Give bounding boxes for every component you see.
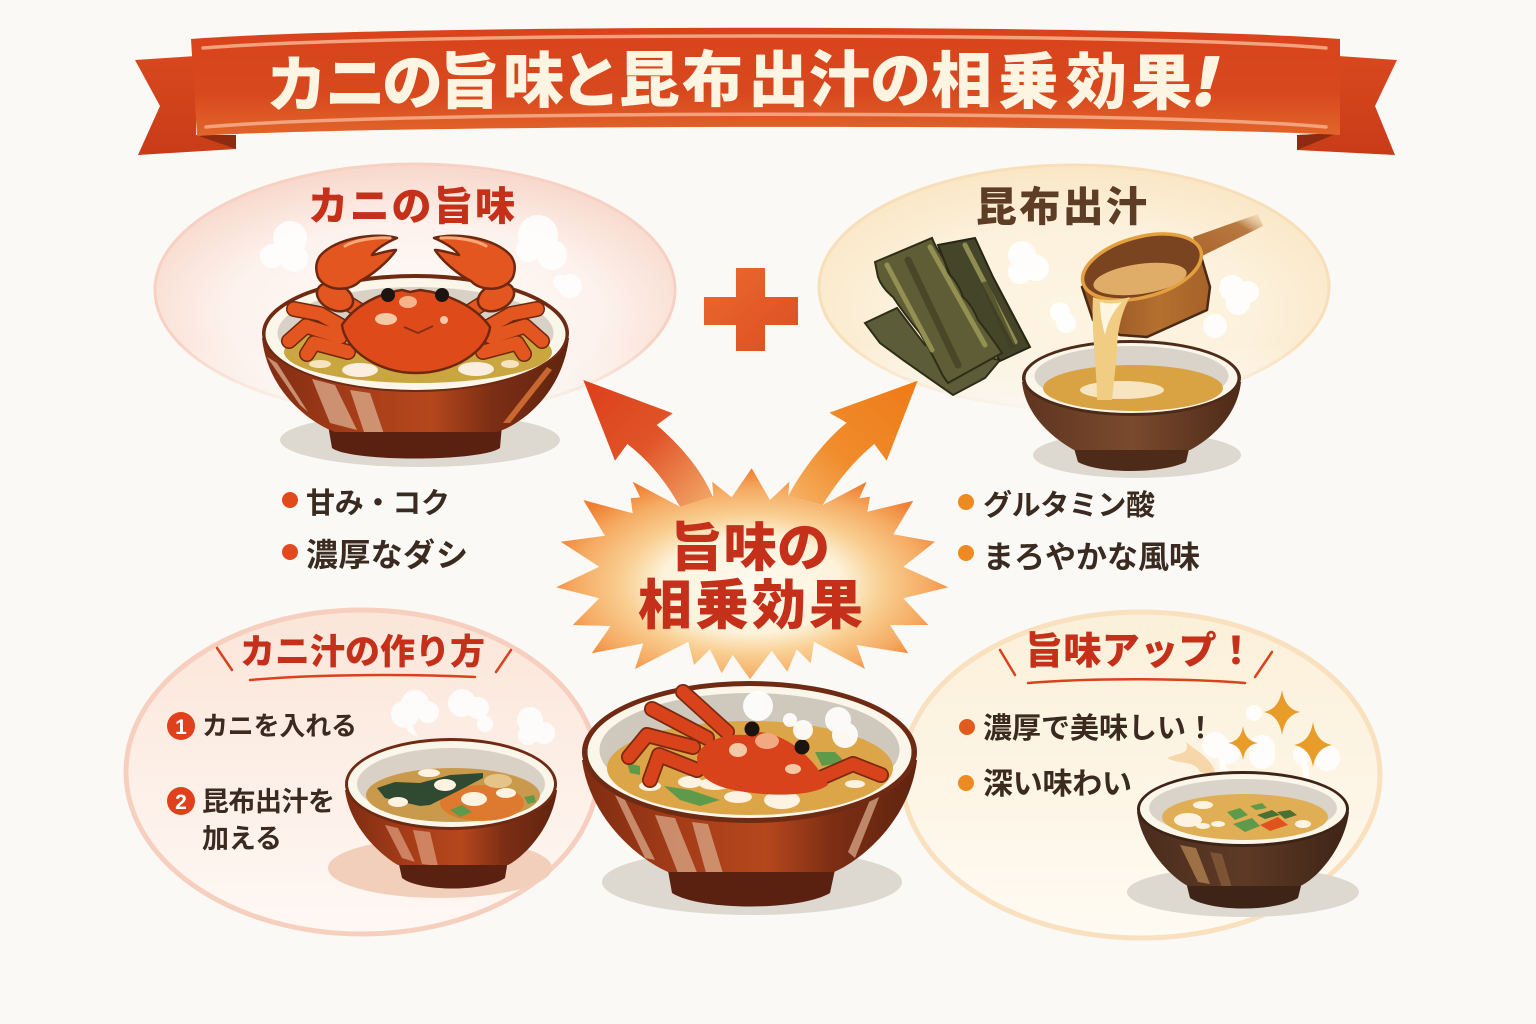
panel: recipe oval bbox=[126, 610, 598, 934]
body bbox=[1137, 812, 1349, 886]
illustration: centre crab soup bowl bbox=[582, 681, 917, 915]
step 2 bbox=[167, 787, 195, 815]
step 1 bbox=[167, 712, 195, 740]
item: 濃厚で美味しい！ bbox=[983, 712, 1215, 745]
burst text: 旨味の bbox=[670, 519, 830, 578]
front sheet bbox=[875, 238, 1002, 383]
illustration: kombu sheets bbox=[865, 238, 1030, 395]
item: 濃厚なダシ bbox=[306, 537, 468, 573]
bowl body bbox=[1022, 382, 1241, 450]
orange wisps bbox=[1167, 742, 1215, 775]
ladle broth bbox=[1091, 258, 1189, 300]
heading: kombu dashi: 昆布出汁 bbox=[976, 184, 1147, 230]
left legs and claw bbox=[289, 236, 397, 354]
foot bbox=[1185, 878, 1303, 908]
crab shell bbox=[697, 732, 828, 795]
bullet bbox=[959, 719, 975, 735]
crab eyes bbox=[744, 722, 760, 736]
heading decoration bbox=[217, 648, 511, 680]
recipe text: 1 bbox=[175, 716, 187, 739]
soup greens and foam bbox=[627, 752, 845, 806]
foot bbox=[667, 865, 836, 906]
illustration: finished soup bowl bbox=[1127, 771, 1359, 917]
burst shape bbox=[556, 468, 948, 679]
bullet bbox=[958, 494, 974, 510]
recipe text: 昆布出汁を bbox=[202, 787, 335, 817]
steam: umami bowl bbox=[1167, 705, 1340, 802]
banner fold shadows bbox=[196, 133, 1338, 150]
banner left tail bbox=[135, 56, 236, 155]
crab bbox=[289, 236, 542, 373]
bullet bbox=[958, 545, 974, 561]
rim bbox=[345, 738, 557, 830]
illustration: recipe bowl bbox=[328, 738, 557, 898]
kombu ribs bbox=[887, 245, 1015, 365]
stripes bbox=[385, 825, 438, 866]
ladle handle bbox=[1193, 214, 1263, 257]
stripes bbox=[1180, 845, 1232, 888]
left claw pincers bbox=[316, 236, 397, 289]
foam and greens bbox=[434, 779, 456, 791]
body bbox=[582, 760, 917, 872]
illustration: dashi bowl with ladle bbox=[1022, 214, 1263, 478]
shadow bbox=[602, 849, 902, 915]
steam clouds: crab bbox=[260, 215, 582, 298]
panel: kombu dashi oval bbox=[819, 165, 1329, 409]
icons: sparkles bbox=[1228, 690, 1332, 767]
item: 甘み・コク bbox=[306, 487, 450, 520]
heading decoration bbox=[1000, 650, 1272, 683]
item: グルタミン酸 bbox=[983, 489, 1155, 522]
recipe text bbox=[167, 633, 511, 854]
title text: カニの旨味と昆布出汁の相乗効果 bbox=[266, 46, 1192, 119]
body bbox=[345, 790, 557, 865]
illustration: crab in bowl bbox=[262, 236, 569, 467]
shell highlights bbox=[375, 313, 397, 325]
list: crab umami bbox=[282, 487, 468, 573]
plus sign bbox=[704, 268, 798, 351]
item: まろやかな風味 bbox=[983, 540, 1200, 575]
steam: recipe bowl bbox=[391, 689, 555, 762]
starburst: synergy bbox=[556, 468, 948, 679]
garnish bbox=[1227, 803, 1267, 832]
bowl shadow bbox=[280, 413, 560, 467]
recipe heading: カニ汁の作り方 bbox=[240, 633, 485, 672]
stripes bbox=[615, 795, 880, 880]
item: 深い味わい bbox=[983, 768, 1132, 801]
banner right tail bbox=[1297, 56, 1397, 155]
bullet bbox=[282, 544, 298, 560]
pouring stream bbox=[1093, 297, 1130, 400]
bullet bbox=[282, 492, 298, 508]
crab legs bbox=[629, 692, 881, 780]
crab shell bbox=[342, 290, 490, 373]
rim bbox=[1137, 771, 1349, 847]
steam clouds: kombu bbox=[1008, 241, 1259, 338]
bullet bbox=[958, 775, 974, 791]
umami up text bbox=[958, 631, 1272, 801]
heading: 旨味アップ！ bbox=[1025, 631, 1255, 673]
steam puffs bbox=[1202, 705, 1340, 771]
bowl rim bbox=[262, 274, 569, 392]
shadow bbox=[1127, 867, 1359, 917]
recipe text: カニを入れる bbox=[202, 711, 357, 741]
arrow: left, to crab bbox=[583, 380, 713, 507]
panel: umami up oval bbox=[902, 612, 1380, 938]
soup bbox=[284, 321, 552, 383]
bowl body bbox=[262, 338, 569, 432]
list: kombu dashi bbox=[958, 489, 1200, 575]
steam trails bbox=[1217, 763, 1306, 802]
bowl shadow bbox=[1033, 432, 1241, 478]
banner inner lines bbox=[203, 36, 1326, 127]
heading: crab umami: カニの旨味 bbox=[308, 185, 515, 229]
title banner bbox=[135, 28, 1397, 155]
steam in bowl bbox=[743, 691, 858, 748]
bowl stripes bbox=[267, 357, 552, 437]
under sheet bbox=[865, 308, 1000, 395]
arrow: right, to kombu bbox=[788, 381, 918, 505]
recipe text: 2 bbox=[175, 791, 187, 814]
shadow bbox=[328, 838, 552, 898]
kombu in soup bbox=[377, 773, 483, 806]
recipe text: 加える bbox=[202, 824, 282, 854]
right legs and claw bbox=[434, 236, 542, 354]
ladle body bbox=[1082, 240, 1210, 337]
title exclamation mark: ！ bbox=[1167, 47, 1246, 119]
bowl foot bbox=[1073, 445, 1190, 471]
dashi soup bbox=[1043, 365, 1223, 411]
rim bbox=[582, 681, 917, 823]
panel: crab umami oval bbox=[155, 164, 675, 416]
ladle inside bbox=[1075, 222, 1209, 312]
starburst: synergy: 相乗効果 bbox=[638, 576, 863, 636]
foot bbox=[398, 860, 508, 888]
soup bbox=[1162, 794, 1328, 840]
left arm joint bbox=[312, 277, 358, 317]
soup bbox=[366, 768, 540, 822]
bowl rim bbox=[1022, 340, 1241, 416]
back sheet bbox=[938, 238, 1030, 361]
soup bbox=[607, 721, 893, 815]
crab eyes bbox=[381, 288, 395, 302]
carrot mass bbox=[440, 785, 524, 821]
banner body bbox=[191, 28, 1340, 136]
bowl foot bbox=[328, 425, 502, 458]
